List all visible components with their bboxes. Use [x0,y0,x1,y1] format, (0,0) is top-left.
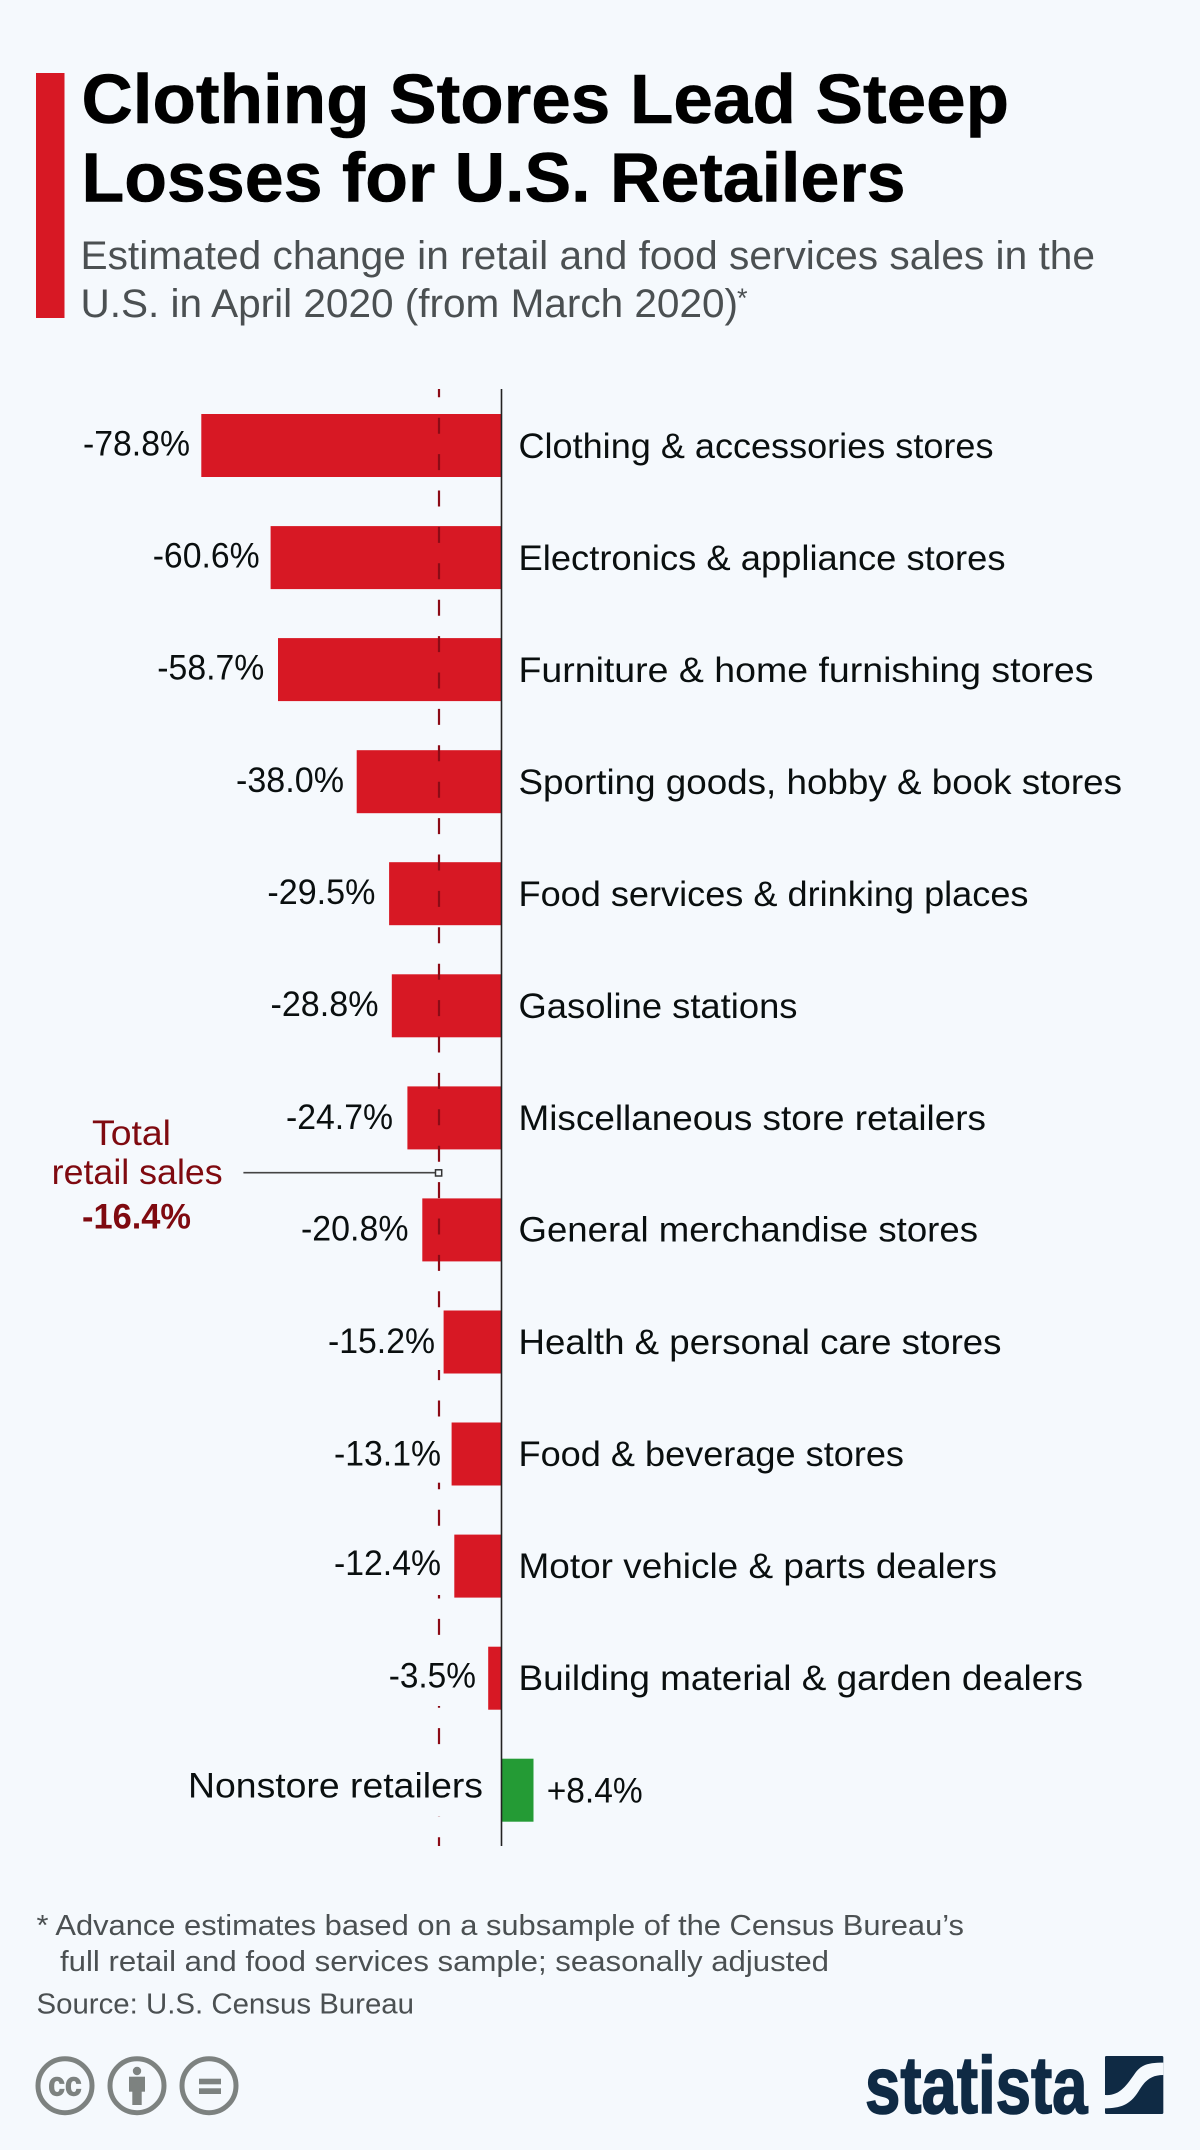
subtitle: U.S. in April 2020 (from March 2020) [80,282,738,326]
title [82,60,1009,216]
value labels: -20.8% [301,1209,408,1249]
category labels: Motor vehicle & parts dealers [518,1546,997,1586]
value labels: -12.4% [334,1543,441,1583]
category labels: General merchandise stores [518,1210,978,1250]
icon: no derivatives equals [182,2059,236,2113]
value labels [83,424,643,1810]
value labels: -78.8% [83,424,190,464]
value labels: -15.2% [328,1321,435,1361]
callout text: retail sales [52,1152,223,1192]
value labels: +8.4% [547,1770,643,1810]
callout: total retail sales [52,1113,442,1236]
category labels: Building material & garden dealers [518,1658,1083,1698]
title: Losses for U.S. Retailers [82,138,906,216]
subtitle [80,234,1095,326]
icon: cc [38,2059,92,2113]
statista logo [865,2041,1163,2131]
category labels: Furniture & home furnishing stores [518,650,1094,690]
icon: creative commons licence [38,2059,236,2113]
callout text [52,1113,223,1236]
category labels: Food services & drinking places [518,874,1028,914]
value labels: -13.1% [334,1434,441,1474]
value labels: -29.5% [267,872,375,912]
category labels: Food & beverage stores [518,1434,904,1474]
icon: attribution person [110,2059,164,2113]
footnote [36,1910,964,1978]
title: Clothing Stores Lead Steep [82,60,1009,138]
category labels [183,426,1122,1817]
icon: cc: cc [48,2066,82,2104]
category labels: Sporting goods, hobby & book stores [518,762,1122,802]
category labels: Miscellaneous store retailers [518,1098,986,1138]
zero axis [500,389,502,1846]
footnote: * Advance estimates based on a subsample of the Census Bureau’s [36,1910,964,1942]
category labels: Clothing & accessories stores [518,426,994,466]
value labels: -3.5% [389,1656,476,1696]
total retail sales dashed line [438,389,440,1846]
category labels: Gasoline stations [518,986,798,1026]
source: Source: U.S. Census Bureau [36,1988,414,2020]
callout text: -16.4% [82,1196,191,1236]
value labels: -60.6% [153,536,260,576]
value labels: -28.8% [270,984,378,1024]
value labels: -38.0% [236,760,344,800]
logo mark [1105,2056,1163,2114]
subtitle: Estimated change in retail and food services sales in the [80,234,1095,278]
subtitle: * [737,283,748,313]
value labels: -58.7% [157,648,264,688]
accent bar [36,73,64,318]
category labels: Nonstore retailers [188,1765,483,1805]
category labels: Health & personal care stores [518,1322,1002,1362]
callout marker [436,1170,442,1176]
callout text: Total [92,1113,171,1153]
value labels: -24.7% [286,1097,393,1137]
category labels: Electronics & appliance stores [518,538,1006,578]
bar chart [83,389,1122,1846]
footnote: full retail and food services sample; seasonally adjusted [60,1946,829,1978]
bars [201,414,534,1822]
callout leader line [243,1172,435,1174]
logo wordmark: statista [865,2041,1088,2131]
